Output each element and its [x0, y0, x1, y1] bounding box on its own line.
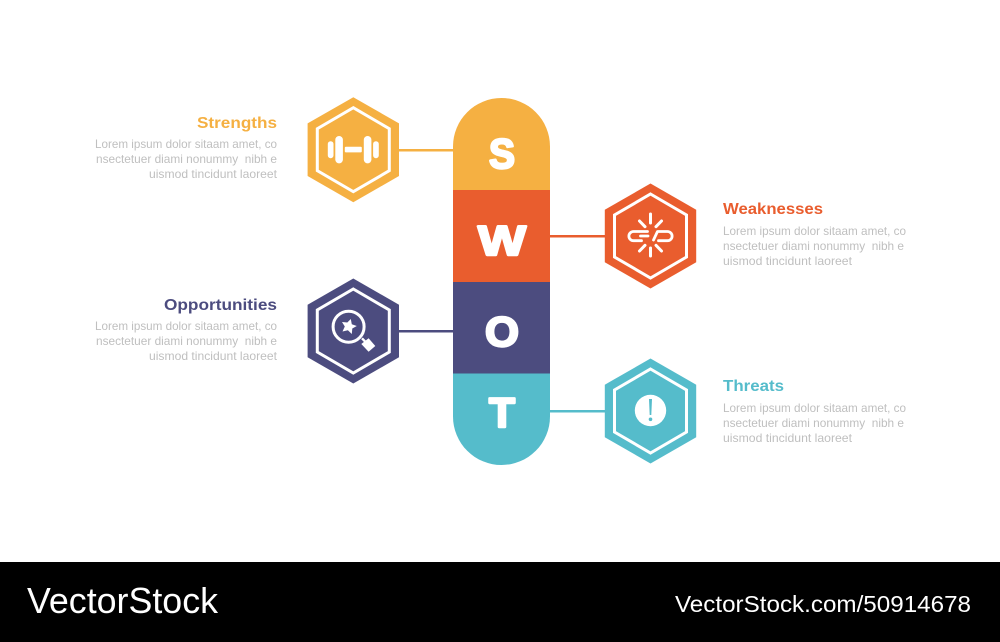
connector: threats: [549, 410, 606, 412]
letter T: T: [489, 389, 515, 436]
hexagon: threats: [605, 358, 696, 464]
text block: opportunities: [95, 297, 278, 363]
text block: threats: nsectetuer diami nonummy nibh e: [723, 416, 904, 430]
letter O: O: [485, 308, 519, 355]
text block: threats: [723, 378, 906, 445]
text block: weaknesses: nsectetuer diami nonummy nibh e: [723, 239, 904, 253]
text block: strengths: Lorem ipsum dolor sitaam amet, co: [95, 137, 277, 151]
hexagon: opportunities: [308, 278, 399, 384]
connector: weaknesses: [549, 235, 606, 238]
text block: threats: uismod tincidunt laoreet: [723, 431, 853, 445]
segment S: [453, 98, 550, 190]
text block: weaknesses: uismod tincidunt laoreet: [723, 254, 853, 268]
heading: strengths: Strengths: [197, 115, 277, 132]
icon: exclamation circle: [635, 395, 666, 426]
segment W: [453, 190, 550, 282]
text block: strengths: nsectetuer diami nonummy nibh e: [96, 152, 277, 166]
letter W: W: [478, 217, 526, 264]
segment T: [453, 374, 550, 465]
central SWOT pill: [453, 98, 550, 465]
segment O: [453, 282, 550, 374]
connector: opportunities: [398, 330, 454, 332]
heading: threats: Threats: [723, 378, 784, 395]
connector: strengths: [398, 149, 454, 152]
text block: threats: Lorem ipsum dolor sitaam amet, co: [723, 401, 906, 415]
footer brand: VectorStock: [27, 580, 219, 621]
text block: weaknesses: [723, 201, 906, 268]
hexagon: weaknesses: [605, 184, 696, 288]
icon: broken chain link: [629, 214, 672, 256]
icon: magnifier with star: [333, 311, 375, 352]
letter S: S: [489, 130, 515, 177]
footer image id: VectorStock.com/50914678: [675, 591, 971, 617]
heading: weaknesses: Weaknesses: [723, 201, 823, 218]
text block: opportunities: nsectetuer diami nonummy nibh e: [96, 334, 277, 348]
text block: opportunities: uismod tincidunt laoreet: [149, 349, 278, 363]
icon: dumbbell: [328, 136, 379, 163]
footer bar: [0, 562, 1000, 642]
hexagon: strengths: [308, 97, 399, 202]
text block: weaknesses: Lorem ipsum dolor sitaam amet, co: [723, 224, 906, 238]
text block: opportunities: Lorem ipsum dolor sitaam amet, co: [95, 319, 277, 333]
text block: strengths: uismod tincidunt laoreet: [149, 167, 278, 181]
text block: strengths: [95, 115, 278, 181]
heading: opportunities: Opportunities: [164, 297, 277, 314]
